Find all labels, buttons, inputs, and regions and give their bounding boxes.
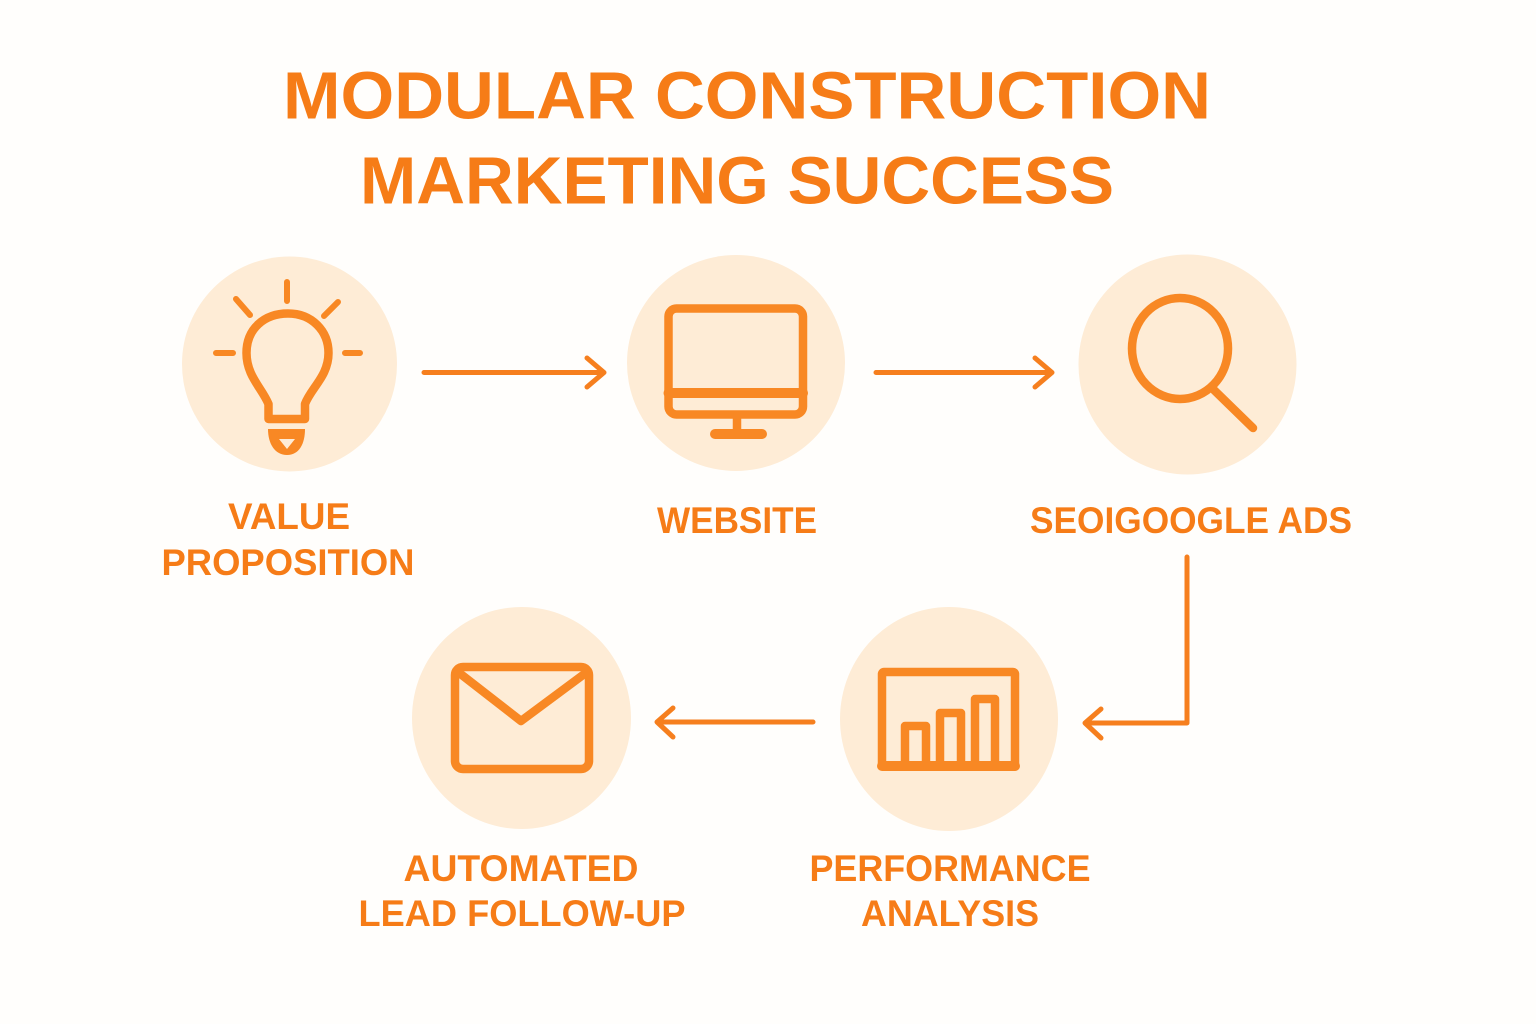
arrow: performance to lead follow-up: [657, 708, 813, 737]
icon: magnifying glass: [1078, 254, 1296, 474]
step: automated lead follow-up: [358, 607, 686, 934]
arrow: website to seo: [876, 358, 1052, 387]
step: value proposition: [162, 256, 414, 583]
label: [358, 848, 686, 934]
title: [283, 58, 1211, 218]
arrow: seo to performance: [1085, 557, 1187, 738]
label: AUTOMATED: [404, 848, 638, 889]
icon: monitor: [627, 255, 845, 471]
label: PROPOSITION: [162, 542, 414, 583]
title: MODULAR CONSTRUCTION: [283, 58, 1211, 134]
label: WEBSITE: [657, 500, 817, 541]
label: VALUE: [228, 496, 350, 537]
icon: light bulb: [182, 256, 397, 472]
label: SEOIGOOGLE ADS: [1030, 500, 1352, 541]
step: performance analysis: [810, 607, 1090, 934]
label: [810, 848, 1090, 934]
step: website: [627, 255, 845, 541]
step: seo google ads: [1030, 254, 1352, 541]
icon: envelope: [412, 607, 631, 829]
arrow: value to website: [424, 358, 604, 387]
label: LEAD FOLLOW-UP: [358, 893, 686, 934]
title: MARKETING SUCCESS: [360, 144, 1114, 218]
label: PERFORMANCE: [810, 848, 1090, 889]
label: ANALYSIS: [861, 893, 1039, 934]
label: [162, 496, 414, 583]
icon: bar chart: [840, 607, 1058, 831]
